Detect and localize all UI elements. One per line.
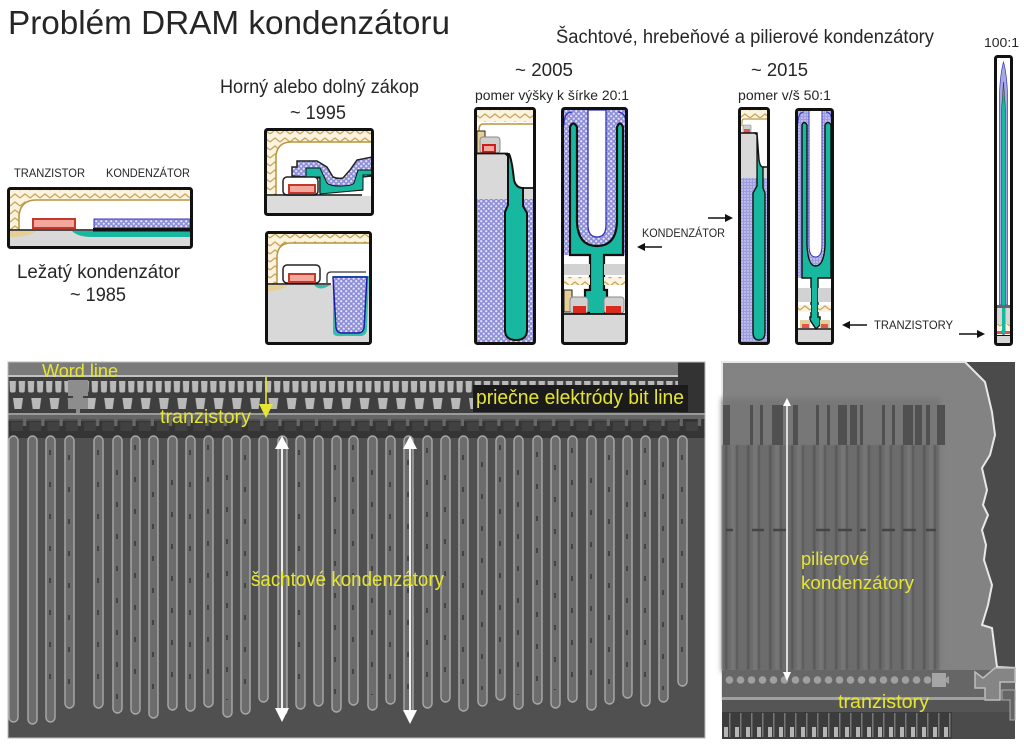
- arrow: yellow to transistors: [259, 377, 273, 418]
- heading: year 1995: ~ 1995: [290, 103, 346, 124]
- diagram: trench capacitor 1995: [266, 232, 371, 344]
- word line contact: [68, 380, 88, 418]
- label: pillar capacitors: [801, 549, 914, 593]
- photo: SEM cross-section of pillar capacitors: [722, 362, 1015, 739]
- label: capacitor with arrows: [637, 214, 733, 251]
- label: aspect ratio 20:1: pomer výšky k šírke 20:1: [475, 87, 629, 103]
- caption: year 1985: ~ 1985: [70, 285, 126, 306]
- heading: stacked or trench capacitor: Horný alebo dolný zákop: [220, 77, 419, 98]
- diagram: trench capacitor 2005: [475, 108, 535, 344]
- diagram: comb capacitor 2015: [796, 109, 833, 344]
- label: trench capacitors: šachtové kondenzátory: [251, 569, 444, 591]
- label: pillar capacitors: pilierové: [801, 549, 869, 569]
- caption: planar capacitor: Ležatý kondenzátor: [17, 262, 181, 283]
- label: transistors with arrows: TRANZISTORY: [874, 318, 953, 332]
- diagram: stacked comb capacitor 2005: [562, 108, 627, 344]
- heading: trench, comb and pillar capacitors: Šachtové, hrebeňové a pilierové kondenzátory: [556, 26, 934, 48]
- label: capacitor: KONDENZÁTOR: [106, 165, 190, 180]
- diagram: pillar capacitor 100:1: [995, 56, 1012, 345]
- label: pillar capacitors: kondenzátory: [801, 573, 914, 593]
- diagram: planar capacitor 1985: [8, 188, 192, 248]
- callout: bit line electrodes: priečne elektródy bit line: [476, 387, 684, 409]
- diagram: trench capacitor 2015: [739, 108, 769, 344]
- label: transistors in pillar photo: tranzistory: [838, 692, 930, 713]
- photo: SEM cross-section of trench capacitors: [8, 362, 705, 738]
- heading: year 2005: ~ 2005: [515, 60, 573, 80]
- label: transistors: tranzistory: [160, 407, 252, 428]
- label: word line: Word line: [42, 361, 118, 381]
- arrow: capacitor height 1: [275, 436, 289, 722]
- label: aspect ratio 50:1: pomer v/š 50:1: [738, 87, 831, 103]
- arrow: capacitor height 2: [403, 436, 417, 724]
- diagram: stacked capacitor 1995: [265, 129, 373, 215]
- label: transistor: TRANZISTOR: [14, 166, 85, 180]
- arrow: pillar height: [783, 398, 791, 681]
- label: transistors with arrows: [842, 318, 985, 338]
- heading: year 2015: ~ 2015: [751, 60, 808, 80]
- label: capacitor with arrows: KONDENZÁTOR: [642, 225, 725, 240]
- title: Problém DRAM kondenzátoru: [8, 4, 450, 41]
- label: aspect ratio 100:1: 100:1: [984, 35, 1019, 50]
